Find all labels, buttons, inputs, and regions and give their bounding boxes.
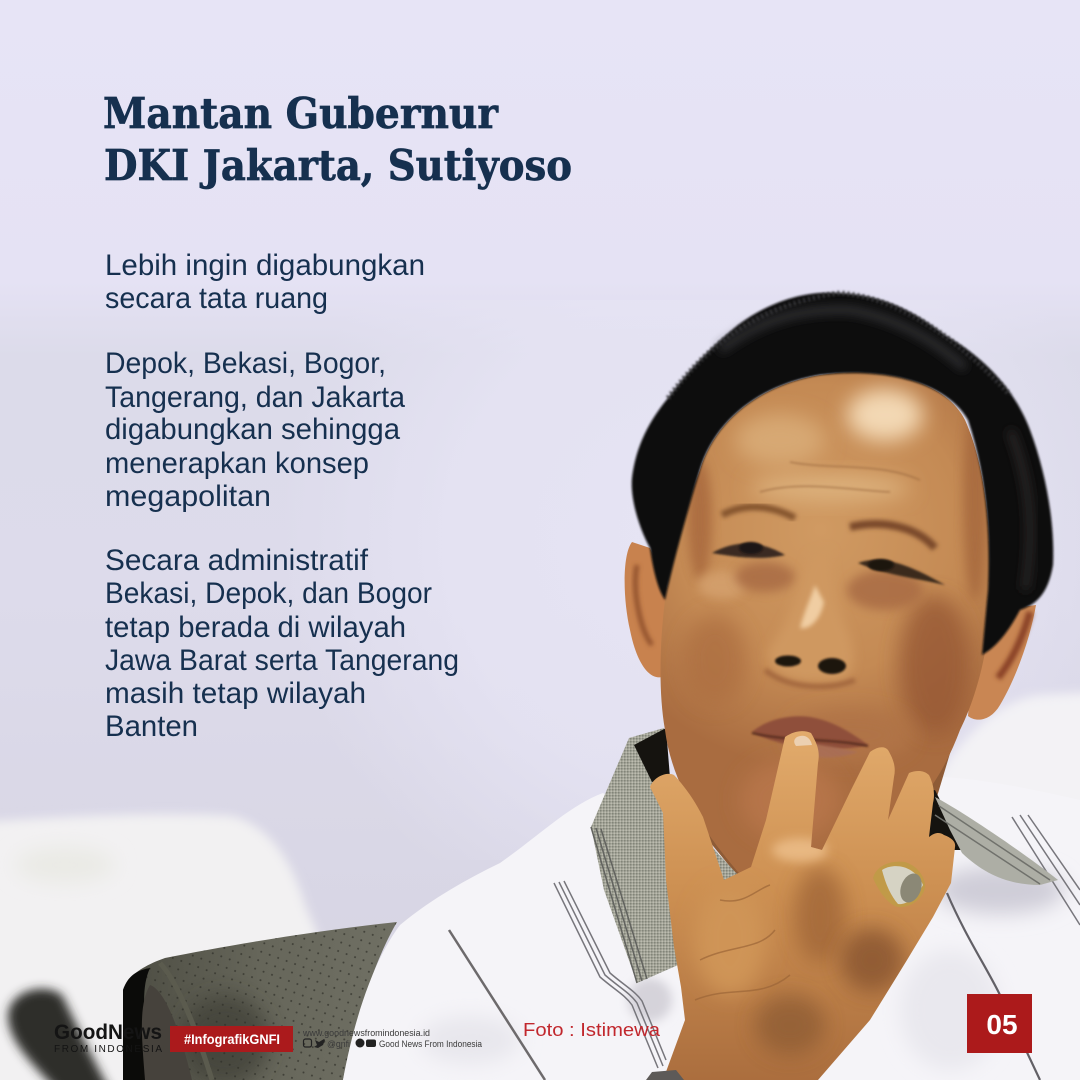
hand <box>650 731 955 1080</box>
social links: @gnfi <box>327 1039 350 1049</box>
shirt stripes <box>449 815 1080 1080</box>
forehead highlight <box>847 389 923 441</box>
text block: paragraph 3 <box>105 544 459 743</box>
shirt <box>343 777 1080 1080</box>
icon: facebook <box>356 1038 364 1048</box>
text block: paragraph 2: Tangerang, dan Jakarta <box>105 381 405 414</box>
chin <box>746 766 834 830</box>
chair armrest <box>123 922 397 1080</box>
icon: instagram <box>304 1039 312 1047</box>
white chair left <box>0 814 330 1080</box>
text block: paragraph 2 <box>105 347 405 513</box>
wrinkles <box>760 462 920 492</box>
mouth <box>752 716 868 749</box>
hashtag badge <box>170 1026 293 1052</box>
logo: GoodNews From Indonesia: GoodNews <box>54 1021 162 1044</box>
text block: paragraph 3: tetap berada di wilayah <box>105 611 406 644</box>
eyes <box>712 543 785 558</box>
text block: paragraph 3: Secara administratif <box>105 544 369 577</box>
ring <box>873 862 926 907</box>
white chair shadow <box>15 847 115 883</box>
photo: portrait scene <box>0 293 1080 1080</box>
text block: paragraph 3: Jawa Barat serta Tangerang <box>105 644 459 677</box>
white chair right <box>930 690 1080 830</box>
text block: paragraph 3: masih tetap wilayah <box>105 677 366 710</box>
text block: paragraph 3: Bekasi, Depok, dan Bogor <box>105 577 432 610</box>
text block: paragraph 1: Lebih ingin digabungkan <box>105 249 425 282</box>
ear right <box>968 605 1036 720</box>
hashtag badge: #InfografikGNFI <box>184 1032 280 1047</box>
page number <box>967 994 1032 1053</box>
text block: paragraph 2: menerapkan konsep <box>105 447 369 480</box>
text block: paragraph 3: Banten <box>105 710 198 743</box>
collar right <box>895 790 1058 885</box>
background haze near the portrait <box>280 300 1080 860</box>
ear left <box>625 542 672 677</box>
shading <box>683 615 747 705</box>
logo: GoodNews From Indonesia: FROM INDONESIA <box>54 1044 162 1055</box>
text block: paragraph 2: digabungkan sehingga <box>105 413 400 446</box>
dark collar interior <box>634 728 670 782</box>
bracelet <box>646 1070 684 1080</box>
microphone blur <box>8 989 115 1080</box>
brows <box>722 507 795 518</box>
icon: twitter <box>314 1039 325 1048</box>
title <box>103 89 572 190</box>
logo: GoodNews From Indonesia <box>54 1021 162 1055</box>
icon: youtube <box>366 1040 376 1047</box>
social links: Good News From Indonesia <box>379 1039 482 1049</box>
social links: www.goodnewsfromindonesia.id <box>302 1028 430 1038</box>
text block: paragraph 2: Depok, Bekasi, Bogor, <box>105 347 386 380</box>
nose <box>770 618 852 681</box>
social links <box>302 1028 482 1049</box>
neck <box>680 720 960 885</box>
title: DKI Jakarta, Sutiyoso <box>104 141 572 190</box>
photo credit: Foto : Istimewa <box>523 1020 661 1040</box>
page number: 05 <box>986 1009 1018 1040</box>
text block: paragraph 1 <box>105 249 425 315</box>
text block: paragraph 1: secara tata ruang <box>105 282 328 315</box>
text block: paragraph 2: megapolitan <box>105 480 271 513</box>
title: Mantan Gubernur <box>103 89 499 138</box>
face <box>660 372 990 873</box>
hair <box>632 293 1053 655</box>
collar left <box>591 728 740 983</box>
